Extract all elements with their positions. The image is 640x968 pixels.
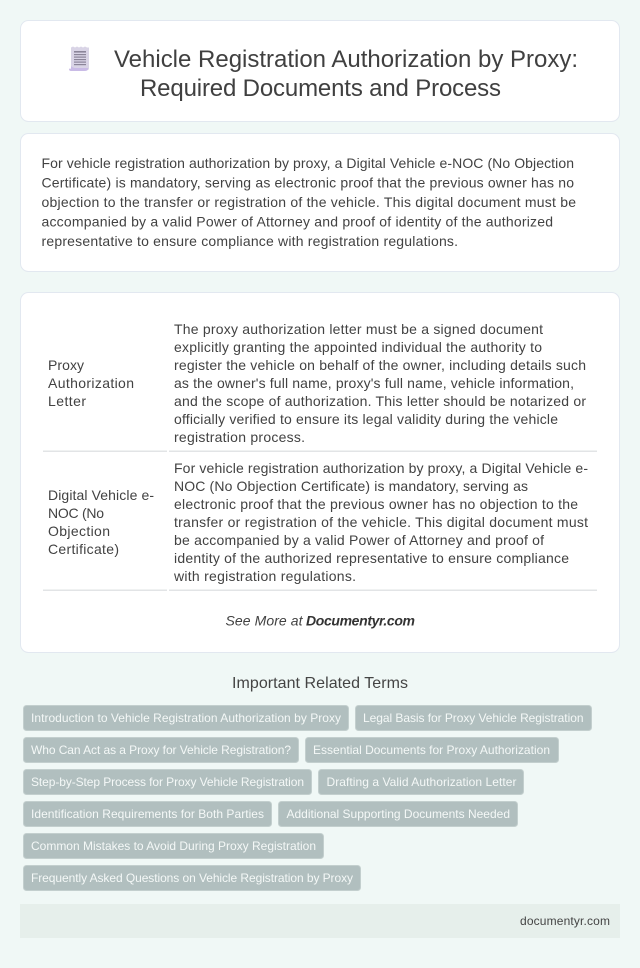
- row label: [48, 357, 134, 409]
- row description: register the vehicle on behalf of the owner, including details such: [174, 357, 586, 373]
- row label: NOC (No: [48, 505, 104, 521]
- row label: Proxy: [48, 357, 84, 373]
- tag: [24, 802, 272, 826]
- row description: officially verified to ensure its legal validity during the vehicle: [174, 411, 558, 427]
- row description: explicitly granting the appointed individual the authority to: [174, 339, 542, 355]
- row description: For vehicle registration authorization by proxy, a Digital Vehicle e-: [174, 460, 588, 476]
- tag: [356, 706, 592, 730]
- tag: Drafting a Valid Authorization Letter: [326, 775, 516, 789]
- tag: [318, 770, 524, 794]
- tag: Essential Documents for Proxy Authorization: [313, 743, 550, 757]
- tag: [278, 802, 518, 826]
- row label: [48, 487, 154, 557]
- tag: Common Mistakes to Avoid During Proxy Registration: [31, 839, 316, 853]
- row description: electronic proof that the previous owner has no objection to the: [174, 496, 578, 512]
- intro text: Certificate) is mandatory, serving as electronic proof that the previous owner has no: [42, 174, 574, 190]
- tag: [24, 738, 298, 762]
- tag: [24, 706, 348, 730]
- row label: Objection: [48, 523, 110, 539]
- panel: title card: [20, 20, 620, 122]
- footer: documentyr.com: [520, 914, 610, 928]
- row description: and the scope of authorization. This letter should be notarized or: [174, 393, 586, 409]
- tag: Legal Basis for Proxy Vehicle Registration: [363, 711, 584, 725]
- heading: important related terms: Important Related Terms: [232, 675, 408, 692]
- row description: The proxy authorization letter must be a signed document: [174, 321, 543, 337]
- tag: Frequently Asked Questions on Vehicle Registration by Proxy: [31, 871, 353, 885]
- row description: transfer or registration of the vehicle. This digital document must: [174, 514, 588, 530]
- row description: [173, 460, 588, 584]
- tag: Step-by-Step Process for Proxy Vehicle Registration: [31, 775, 304, 789]
- title: Required Documents and Process: [140, 75, 501, 102]
- title: [114, 46, 578, 102]
- see more link: See More at: [226, 612, 304, 628]
- intro text: objection to the transfer or registration of the vehicle. This digital document must be: [42, 194, 576, 210]
- panel: intro paragraph: [20, 134, 620, 272]
- tag: Who Can Act as a Proxy for Vehicle Registration?: [31, 743, 291, 757]
- tag: Additional Supporting Documents Needed: [286, 807, 510, 821]
- row description: identity of the authorized representative to ensure compliance: [174, 550, 569, 566]
- footer: [20, 904, 620, 938]
- row label: Letter: [48, 393, 86, 409]
- intro text: [42, 155, 576, 249]
- icon: document scroll: [69, 46, 89, 71]
- row description: as the owner's full name, proxy's full name, vehicle information,: [174, 375, 574, 391]
- tag: [24, 834, 324, 858]
- tag: [306, 738, 558, 762]
- see more link: [226, 612, 415, 628]
- row label: Certificate): [48, 541, 119, 557]
- tag: [24, 770, 312, 794]
- row description: registration process.: [174, 429, 305, 445]
- row label: Digital Vehicle e-: [48, 487, 154, 503]
- row description: [174, 321, 586, 445]
- row label: Authorization: [48, 375, 134, 391]
- intro text: accompanied by a valid Power of Attorney and proof of identity of the authorized: [42, 214, 553, 230]
- see more link: Documentyr.com: [306, 612, 415, 628]
- title: Vehicle Registration Authorization by Proxy:: [114, 46, 578, 73]
- tag: Introduction to Vehicle Registration Authorization by Proxy: [31, 711, 341, 725]
- tag: Identification Requirements for Both Parties: [31, 807, 264, 821]
- row: digital vehicle e-NOC: [48, 460, 588, 584]
- row: proxy authorization letter: [48, 321, 586, 445]
- row description: be accompanied by a valid Power of Attorney and proof of: [174, 532, 544, 548]
- panel: document table: [20, 292, 620, 652]
- intro text: For vehicle registration authorization by proxy, a Digital Vehicle e-NOC (No Objection: [42, 155, 574, 171]
- row description: NOC (No Objection Certificate) is mandatory, serving as: [174, 478, 528, 494]
- intro text: representative to ensure compliance with registration regulations.: [42, 233, 458, 249]
- tag: [24, 866, 360, 890]
- panel: related term tags: [24, 706, 592, 890]
- row description: with registration regulations.: [173, 568, 356, 584]
